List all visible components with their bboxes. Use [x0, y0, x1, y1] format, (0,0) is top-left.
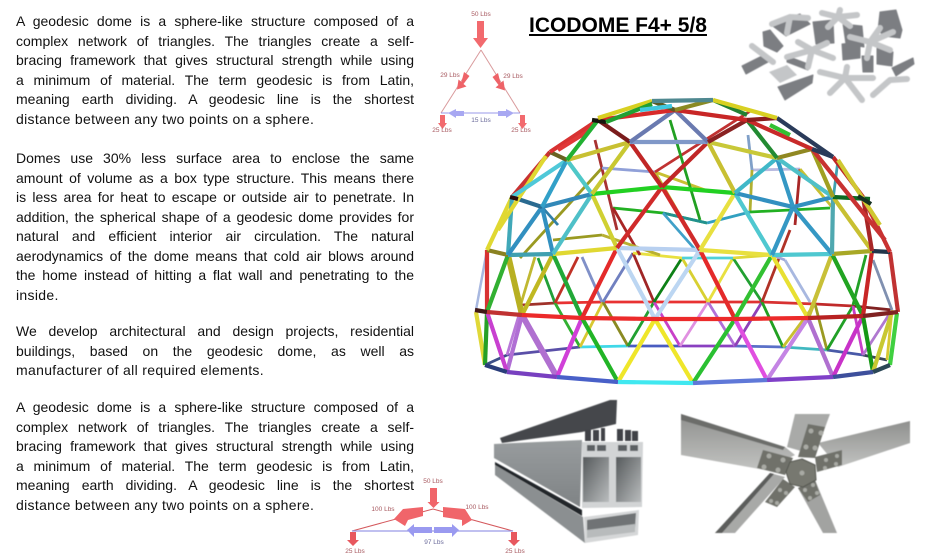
image: five-way node connector — [681, 414, 910, 533]
text: energy efficiency of domes: inside. — [16, 286, 59, 302]
text: company services: We develop architectural and design projects, residential — [16, 323, 414, 339]
text: geodesic dome definition repeated: bracing framework that gives structural strength while using — [16, 438, 414, 454]
image: aluminium beam profile — [494, 400, 643, 543]
text: energy efficiency of domes: Domes use 30% less surface area to enclose the same — [16, 150, 414, 166]
text: geodesic dome definition: A geodesic dome is a sphere-like structure composed of a — [16, 13, 414, 29]
text: energy efficiency of domes: is less area for heat to escape or outside air to penetrate. In — [16, 189, 414, 205]
chart: flat truss force diagram, 100 Lbs load: 100 Lbs — [371, 506, 395, 513]
image: connector brackets pile — [742, 10, 914, 100]
text: geodesic dome definition repeated: meaning earth dividing. A geodesic line is the shortest — [16, 477, 414, 493]
chart: flat truss force diagram, 100 Lbs load: 97 Lbs — [424, 539, 445, 546]
text: energy efficiency of domes: natural and efficient interior air circulation. The natural — [16, 228, 414, 244]
text: geodesic dome definition repeated: A geodesic dome is a sphere-like structure composed of a — [16, 399, 414, 415]
text: company services: manufacturer of all required elements. — [16, 362, 264, 378]
chart: triangle force diagram, 50 Lbs load: 15 Lbs — [471, 117, 492, 124]
chart: flat truss force diagram, 100 Lbs load — [345, 478, 526, 555]
text: geodesic dome definition repeated: distance between any two points on a sphere. — [16, 496, 314, 512]
chart: flat truss force diagram, 100 Lbs load: 100 Lbs — [465, 504, 489, 511]
text: geodesic dome definition: bracing framework that gives structural strength while using — [16, 52, 414, 68]
text: energy efficiency of domes: addition, the spherical shape of a geodesic dome provides for — [16, 208, 414, 224]
text: geodesic dome definition repeated: a minimum of material. The term geodesic is from Latin, — [16, 458, 414, 474]
dome front struts — [475, 100, 898, 383]
light star brackets — [752, 10, 907, 100]
chart: triangle force diagram, 50 Lbs load: 25 Lbs — [511, 127, 532, 134]
chart: triangle force diagram, 50 Lbs load: 25 Lbs — [432, 127, 453, 134]
chart: triangle force diagram, 50 Lbs load: 50 Lbs — [471, 11, 492, 18]
title: ICODOME F4+ 5/8 — [529, 14, 707, 37]
chart: flat truss force diagram, 100 Lbs load: 25 Lbs — [505, 548, 526, 555]
text: geodesic dome definition: a minimum of material. The term geodesic is from Latin, — [16, 72, 414, 88]
text: geodesic dome definition repeated: complex network of triangles. The triangles create a self- — [16, 418, 414, 434]
chart: flat truss force diagram, 100 Lbs load: 25 Lbs — [345, 548, 366, 555]
chart: flat truss force diagram, 100 Lbs load: 50 Lbs — [423, 478, 444, 485]
chart: triangle force diagram, 50 Lbs load: 29 Lbs — [440, 72, 461, 79]
dome rear struts — [485, 110, 892, 365]
text: geodesic dome definition: meaning earth dividing. A geodesic line is the shortest — [16, 91, 414, 107]
text: geodesic dome definition: distance between any two points on a sphere. — [16, 110, 314, 126]
text: geodesic dome definition — [16, 13, 414, 127]
text: company services — [16, 323, 414, 378]
chart: triangle force diagram, 50 Lbs load: 29 Lbs — [503, 73, 524, 80]
text: energy efficiency of domes: aerodynamics of the dome means that cold air blows around — [16, 248, 414, 264]
text: geodesic dome definition: complex network of triangles. The triangles create a self- — [16, 32, 414, 48]
text: energy efficiency of domes: amount of volume as a box type structure. This means there — [16, 170, 414, 186]
text: company services: buildings, based on the geodesic dome, as well as — [16, 342, 414, 358]
text: energy efficiency of domes: the home instead of hitting a flat wall and penetrating to the — [16, 267, 414, 283]
chart: triangle force diagram, 50 Lbs load — [432, 11, 532, 134]
text: geodesic dome definition repeated — [16, 399, 414, 513]
image: geodesic dome frame — [475, 100, 898, 383]
dark stacked bracket fins — [742, 10, 914, 100]
text: energy efficiency of domes — [16, 150, 414, 302]
